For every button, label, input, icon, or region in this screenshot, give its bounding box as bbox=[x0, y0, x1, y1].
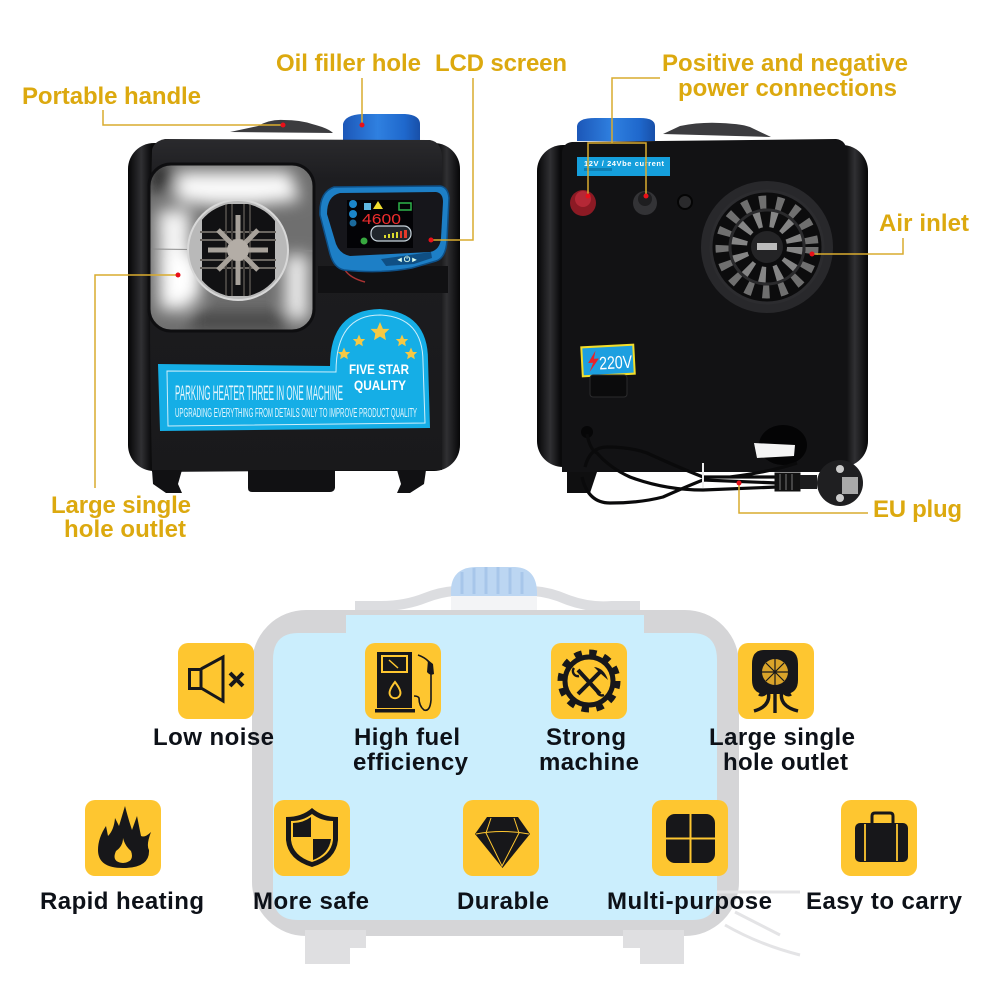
icon: diamond bbox=[475, 817, 530, 868]
faded cable bbox=[716, 892, 800, 955]
feature: multi-purpose bbox=[607, 800, 772, 915]
icon: outlet with air flow bbox=[752, 650, 798, 713]
feature: durable bbox=[457, 800, 549, 915]
feature: more safe: More safe bbox=[253, 888, 369, 915]
front casing bbox=[128, 143, 460, 471]
callout: large single hole outlet bbox=[51, 492, 191, 543]
feature: multi-purpose: Multi-purpose bbox=[607, 888, 772, 915]
feature: durable: Durable bbox=[457, 888, 549, 915]
front panel bbox=[150, 139, 442, 472]
feature: easy to carry bbox=[806, 800, 963, 915]
positive terminal bbox=[570, 190, 596, 216]
five star quality label: FIVE STAR bbox=[349, 361, 409, 377]
voltage sticker bbox=[577, 157, 670, 176]
five star quality label bbox=[158, 309, 430, 431]
feature: high fuel efficiency: High fuel bbox=[354, 724, 460, 751]
faded cap bbox=[451, 567, 537, 596]
five star quality label: QUALITY bbox=[354, 377, 407, 393]
outlet grille bbox=[188, 200, 288, 300]
feature: more safe bbox=[253, 800, 369, 915]
feature: strong machine: machine bbox=[539, 749, 639, 776]
feature: low noise: Low noise bbox=[153, 724, 274, 751]
heater: front view bbox=[128, 114, 460, 493]
feature: rapid heating: Rapid heating bbox=[40, 888, 204, 915]
icon: flame bbox=[98, 806, 151, 868]
icon: suitcase bbox=[855, 813, 908, 862]
heater: rear view bbox=[537, 118, 868, 506]
five star quality label: PARKING HEATER THREE IN ONE MACHINE bbox=[175, 382, 343, 405]
220V sticker bbox=[581, 345, 635, 376]
LCD controller: ◂ ⏻ ▸ bbox=[397, 255, 417, 264]
faded heater backdrop bbox=[264, 567, 800, 964]
feature: large single hole outlet bbox=[709, 643, 855, 776]
rear casing bbox=[537, 145, 868, 467]
feature: high fuel efficiency: efficiency bbox=[353, 749, 469, 776]
icon: fuel pump bbox=[375, 652, 434, 712]
cable exit hole bbox=[754, 425, 807, 465]
feature: high fuel efficiency bbox=[353, 643, 469, 776]
icon: four panels bbox=[666, 814, 715, 863]
silver outlet plate bbox=[149, 164, 314, 331]
feature: large single hole outlet: hole outlet bbox=[723, 749, 848, 776]
callout: oil filler hole: Oil filler hole bbox=[276, 50, 421, 77]
feet and bottom duct bbox=[152, 470, 426, 493]
oil filler cap bbox=[343, 114, 420, 141]
callout: power connections bbox=[662, 50, 908, 102]
feature: strong machine: Strong bbox=[546, 724, 626, 751]
220V sticker: 220V bbox=[599, 352, 633, 373]
callout: power connections: Positive and negative bbox=[662, 50, 908, 77]
leader lines and callout dots bbox=[95, 78, 903, 513]
icon: shield bbox=[286, 808, 338, 867]
faded frame bbox=[264, 622, 727, 924]
callout: power connections: power connections bbox=[678, 75, 897, 102]
feature: easy to carry: Easy to carry bbox=[806, 888, 963, 915]
heater: front view: UPGRADING EVERYTHING FROM DETAILS ONLY TO IMPROVE PRODUCT QUALITY bbox=[175, 405, 417, 420]
callout: LCD screen: LCD screen bbox=[435, 50, 567, 77]
icon: muted speaker bbox=[190, 657, 243, 701]
rear cap bbox=[577, 118, 655, 141]
EU plug cable bbox=[582, 434, 863, 506]
outlet plate rim bbox=[149, 164, 314, 331]
callout: EU plug: EU plug bbox=[873, 496, 962, 523]
LCD controller: 4600 bbox=[362, 211, 401, 228]
cap ribs bbox=[462, 567, 522, 594]
rear foot bbox=[567, 472, 597, 493]
negative terminal bbox=[633, 191, 657, 215]
socket cover bbox=[590, 375, 627, 397]
callout: portable handle: Portable handle bbox=[22, 83, 201, 110]
rear panel bbox=[562, 139, 847, 472]
callout: large single hole outlet: Large single bbox=[51, 492, 191, 519]
faded neck bbox=[451, 596, 537, 618]
air inlet fan bbox=[701, 181, 833, 313]
feature: large single hole outlet: Large single bbox=[709, 724, 855, 751]
callout: air inlet: Air inlet bbox=[879, 210, 969, 237]
callout: large single hole outlet: hole outlet bbox=[64, 516, 186, 543]
cord port bbox=[581, 426, 593, 438]
faded feet bbox=[305, 930, 684, 964]
feature: rapid heating bbox=[40, 800, 204, 915]
rear handle bbox=[663, 123, 771, 137]
faded handle bbox=[355, 591, 640, 606]
light blue panel bbox=[273, 615, 717, 920]
feature: low noise bbox=[153, 643, 274, 751]
LCD controller bbox=[318, 186, 449, 293]
portable handle bbox=[230, 120, 333, 133]
feature: strong machine bbox=[539, 643, 639, 776]
icon: gear with tools bbox=[561, 653, 617, 709]
small port bbox=[678, 195, 692, 209]
voltage sticker: 12V / 24Vbe current bbox=[584, 159, 664, 168]
